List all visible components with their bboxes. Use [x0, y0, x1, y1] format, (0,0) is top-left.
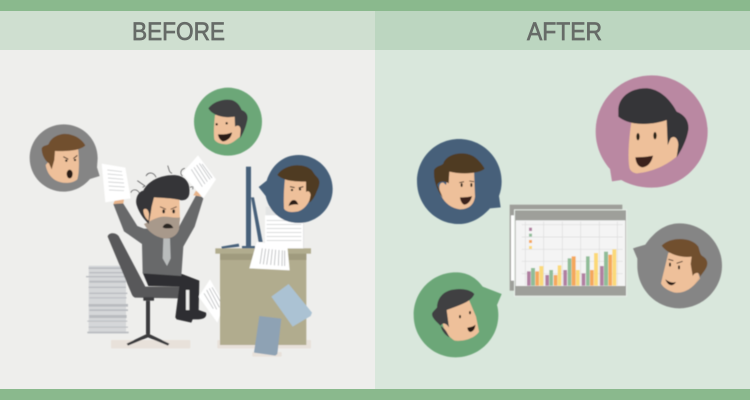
illustration: before scene: [30, 88, 333, 357]
illustration: after scene: [414, 75, 722, 357]
bubble: shouting man, green: [194, 88, 262, 156]
tie: [163, 238, 171, 266]
legend: [529, 228, 532, 249]
bubble: angry man, grey: [30, 124, 100, 192]
panel: after background: [375, 50, 750, 390]
bottom green band: [0, 389, 750, 400]
chart grid: [522, 222, 623, 285]
bubble: frowning man, blue: [259, 155, 333, 223]
bubble: smiling man, green: [414, 272, 502, 357]
face: [42, 134, 85, 183]
grey-blue folder: [254, 316, 281, 356]
front report with bar chart: [514, 209, 627, 297]
falling paper by knee: [199, 279, 224, 323]
paper in right hand: [182, 155, 216, 198]
desk: [215, 248, 311, 345]
heading band: before: [0, 11, 375, 50]
stress marks: [131, 166, 197, 194]
paper stack: [86, 266, 129, 333]
man's legs: [143, 273, 206, 323]
gap between legs: [186, 290, 189, 310]
face: [208, 100, 248, 144]
face: [432, 289, 479, 341]
paper in left hand: [102, 164, 131, 202]
heading: AFTER: AFTER: [527, 18, 602, 46]
light blue folder: [271, 284, 312, 327]
monitor: [242, 167, 263, 248]
bars: orange: [535, 255, 612, 286]
face: [618, 88, 688, 173]
paper on desk edge: [249, 242, 290, 270]
paper stack on desk: [265, 207, 304, 248]
man's head: [136, 175, 190, 238]
bars: yellow: [539, 249, 616, 286]
face: [434, 153, 485, 209]
office chair: [108, 233, 180, 346]
hands: [113, 191, 204, 204]
panel: before background: [0, 50, 375, 390]
bars: purple: [527, 266, 604, 286]
bars: green: [531, 252, 608, 286]
floor shadows: [111, 340, 311, 357]
top green band: [0, 0, 750, 11]
back report sheet: [510, 205, 622, 291]
keyboard: [221, 244, 239, 249]
man's torso and arms: [113, 195, 204, 276]
face: [661, 239, 707, 293]
bubble: smiling man, grey: [633, 223, 722, 308]
heading: BEFORE: BEFORE: [132, 18, 225, 46]
bubble: smiling man, blue: [417, 139, 502, 224]
bubble: happy man, pink: [596, 75, 708, 188]
face: [277, 165, 319, 212]
heading band: after: [375, 11, 750, 50]
